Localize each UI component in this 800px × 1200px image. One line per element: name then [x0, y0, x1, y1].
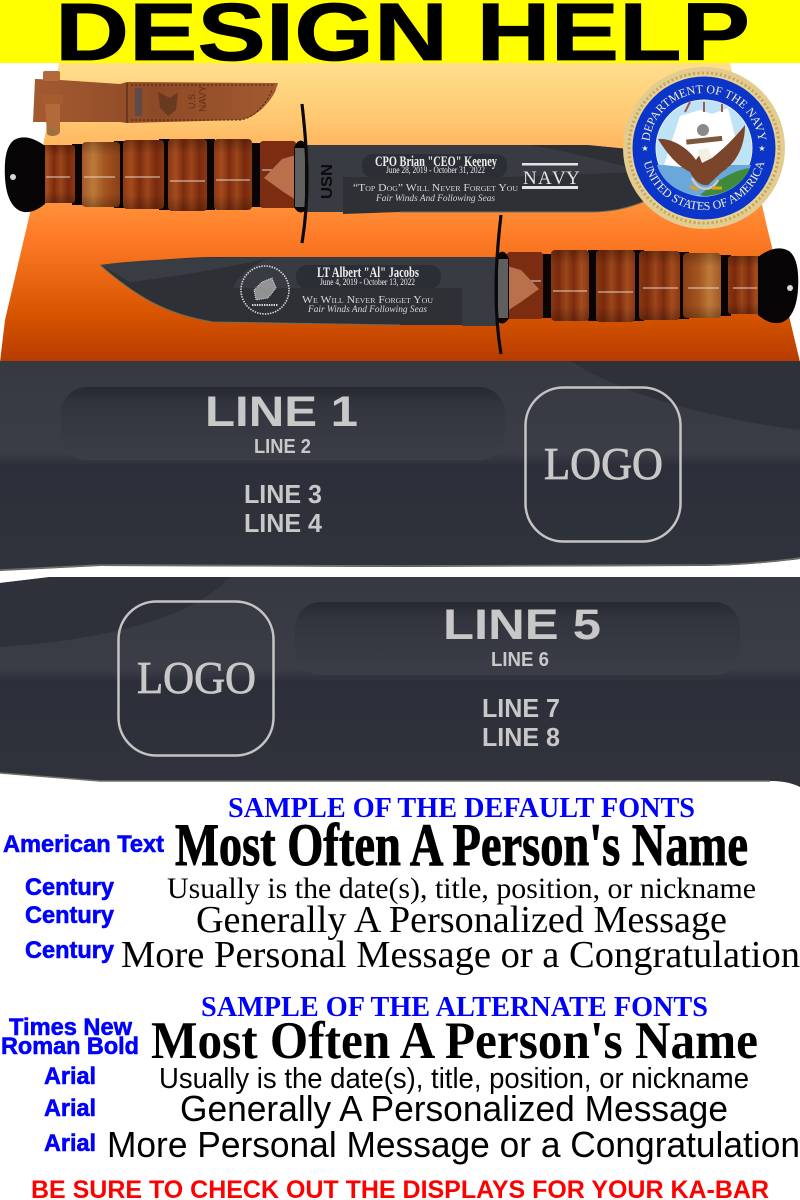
icon: leather sheath: U.S. — [187, 91, 197, 109]
sample lines: More Personal Message or a Congratulation — [121, 934, 800, 976]
knife 1 engraving: “Top Dog” Will Never Forget You — [353, 183, 518, 194]
groove — [295, 602, 740, 675]
icon: Department of the Navy seal: DEPARTMENT OF THE NAVY — [642, 85, 766, 142]
title banner — [0, 0, 800, 78]
engraved lines 5 to 8: LINE 5 — [443, 601, 601, 649]
panel: alternate font samples: More Personal Message or a Congratulation — [107, 1124, 800, 1165]
sample lines: Generally A Personalized Message — [196, 899, 727, 941]
knife 1 engraving: CPO Brian "CEO" Keeney — [375, 154, 497, 170]
font labels — [1, 1014, 139, 1157]
font labels: Arial — [44, 1130, 96, 1157]
knife 1 — [5, 104, 660, 243]
knife 1 USN stamp: USN — [319, 164, 336, 199]
font labels: Century — [25, 902, 115, 929]
knife 1 NAVY mark: NAVY — [523, 168, 580, 189]
knife 2 — [100, 215, 798, 354]
sample lines: Most Often A Person's Name — [151, 1012, 758, 1070]
icon: Department of the Navy seal: ★ — [641, 144, 649, 153]
engraved lines 1 to 4: LINE 2 — [254, 436, 311, 458]
knife 2 engraving: Fair Winds And Following Seas — [307, 305, 427, 315]
logo placeholder: LOGO — [544, 439, 663, 489]
heading: default fonts: SAMPLE OF THE DEFAULT FONTS — [228, 793, 695, 824]
knife 1 engraving: Fair Winds And Following Seas — [375, 194, 495, 204]
logo placeholder — [118, 602, 274, 756]
knife 1 engraving — [353, 154, 518, 204]
sample lines: Usually is the date(s), title, position, or nickname — [167, 872, 756, 905]
knife 2 blade — [100, 257, 497, 325]
icon: Department of the Navy seal: ★ — [758, 144, 766, 153]
panel: alternate font samples: Generally A Personalized Message — [180, 1088, 728, 1129]
engraved lines 5 to 8: LINE 6 — [491, 649, 549, 671]
sample lines — [121, 812, 800, 976]
heading: alternate fonts: SAMPLE OF THE ALTERNATE FONTS — [201, 992, 708, 1023]
knife 1 engraving: June 28, 2019 - October 31, 2022 — [386, 165, 485, 175]
knife 1 blade — [305, 145, 660, 212]
engraved lines 5 to 8: LINE 8 — [482, 722, 560, 752]
panel: blade closeup 1 — [0, 361, 800, 571]
font labels: Arial — [44, 1063, 96, 1090]
font labels — [3, 831, 164, 964]
logo placeholder: LOGO — [137, 653, 256, 703]
engraved lines 1 to 4: LINE 1 — [205, 388, 358, 436]
font labels: Arial — [44, 1095, 96, 1122]
icon: leather sheath: NAVY — [198, 85, 209, 112]
icon: Department of the Navy seal — [623, 67, 785, 229]
groove — [61, 387, 505, 460]
knife 2 engraving: We Will Never Forget You — [302, 295, 433, 306]
knife 1 name groove — [362, 154, 507, 178]
font labels: Times New — [9, 1014, 132, 1041]
engraved lines 1 to 4: LINE 3 — [244, 479, 322, 509]
panel: blade closeup 2 — [0, 577, 800, 787]
font labels: American Text — [3, 831, 164, 858]
knife 2 engraving: June 4, 2019 - October 13, 2022 — [320, 277, 415, 287]
knife 2 engraving — [302, 265, 433, 315]
orange backdrop — [0, 63, 800, 362]
knife 2 handle — [496, 215, 798, 354]
panel: alternate font samples — [1, 992, 800, 1165]
engraved lines 5 to 8 — [443, 601, 601, 752]
knife 1 handle — [5, 104, 307, 243]
knife 2 engraving: LT Albert "Al" Jacobs — [317, 265, 419, 281]
font labels: Century — [25, 874, 115, 901]
panel: alternate font samples: Usually is the date(s), title, position, or nickname — [159, 1063, 749, 1095]
panel: default font samples — [3, 793, 800, 976]
engraved lines 5 to 8: LINE 7 — [482, 693, 560, 723]
knife 2 dotted logo — [241, 266, 289, 314]
logo placeholder — [526, 388, 680, 542]
engraved lines 1 to 4 — [205, 388, 358, 538]
font labels: Century — [25, 937, 115, 964]
icon: Department of the Navy seal: UNITED STATES OF AMERICA — [644, 160, 764, 210]
icon: leather sheath — [33, 71, 278, 136]
knife 2 name groove — [296, 265, 441, 289]
engraved lines 1 to 4: LINE 4 — [244, 508, 323, 538]
font labels: Roman Bold — [1, 1033, 139, 1060]
